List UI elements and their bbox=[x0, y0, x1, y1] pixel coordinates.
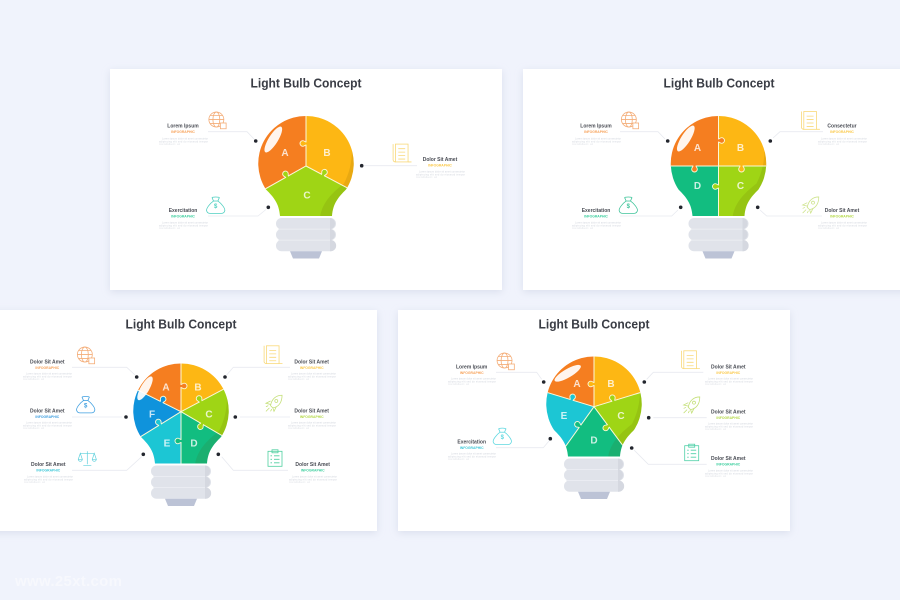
callout: bottom right bbox=[216, 450, 337, 484]
title: Light Bulb Concept bbox=[538, 318, 650, 332]
callout: top left: incididunt ut bbox=[23, 378, 44, 381]
callout: middle left: Lorem ipsum dolor sit amet consectetur bbox=[26, 422, 72, 424]
callout: bottom left: INFOGRAPHIC bbox=[36, 469, 61, 473]
bulb: A B C D: B bbox=[737, 143, 744, 154]
callout: top right: incididunt ut bbox=[288, 378, 309, 381]
bulb: A to E: E bbox=[561, 411, 568, 422]
callout: Dolor Sit Amet: Lorem ipsum dolor sit amet consectetur bbox=[419, 170, 465, 174]
callout: middle right: adipiscing elit sed do eiusmod tempor bbox=[705, 425, 753, 428]
callout: Lorem Ipsum: incididunt ut bbox=[448, 383, 469, 386]
callout: top left: INFOGRAPHIC bbox=[35, 366, 60, 370]
callout: middle right: incididunt ut bbox=[705, 428, 726, 431]
callout: bottom right: adipiscing elit sed do eiusmod tempor bbox=[705, 472, 753, 475]
callout: Exercitation: Lorem ipsum dolor sit amet consectetur bbox=[162, 222, 208, 224]
bulb: A to F: B bbox=[194, 382, 202, 393]
callout: Exercitation: INFOGRAPHIC bbox=[460, 446, 484, 450]
bulb: A to E bbox=[546, 356, 642, 499]
callout: bottom right: incididunt ut bbox=[705, 475, 726, 478]
callout: top right: INFOGRAPHIC bbox=[716, 371, 741, 375]
callout: Dolor Sit Amet: Lorem ipsum dolor sit amet consectetur bbox=[821, 222, 867, 224]
bulb: A B C: B bbox=[323, 148, 331, 159]
callout: top right: adipiscing elit sed do eiusmod tempor bbox=[705, 380, 753, 383]
callout: bottom left: adipiscing elit sed do eiusmod tempor bbox=[24, 478, 73, 481]
callout: Lorem Ipsum: incididunt ut bbox=[572, 143, 593, 146]
bulb: A to E: B bbox=[607, 379, 615, 390]
callout: Lorem Ipsum: Lorem Ipsum bbox=[456, 364, 488, 370]
callout: Exercitation: Exercitation bbox=[457, 440, 486, 446]
callout: Dolor Sit Amet: incididunt ut bbox=[818, 227, 839, 230]
callout: Lorem Ipsum: Lorem Ipsum bbox=[167, 124, 199, 130]
callout: Exercitation: Lorem ipsum dolor sit amet consectetur bbox=[575, 222, 621, 224]
callout: Dolor Sit Amet: adipiscing elit sed do eiusmod tempor bbox=[818, 224, 867, 227]
bulb: A B C D: C bbox=[737, 181, 744, 192]
callout: Exercitation: Lorem ipsum dolor sit amet consectetur bbox=[451, 452, 496, 456]
bulb: A B C D: D bbox=[694, 181, 701, 192]
callout: Dolor Sit Amet: Dolor Sit Amet bbox=[423, 157, 458, 163]
callout: Dolor Sit Amet: adipiscing elit sed do eiusmod tempor bbox=[416, 173, 465, 176]
callout: middle left: Dolor Sit Amet bbox=[30, 408, 65, 414]
callout: Exercitation: $ bbox=[214, 204, 218, 210]
callout: middle left: INFOGRAPHIC bbox=[35, 415, 60, 419]
callout: Exercitation: Exercitation bbox=[169, 208, 197, 214]
callout: bottom left: Dolor Sit Amet bbox=[31, 462, 66, 468]
callout: middle left: adipiscing elit sed do eiusmod tempor bbox=[23, 424, 72, 427]
callout: Lorem Ipsum: INFOGRAPHIC bbox=[171, 130, 195, 134]
panel: six-part bulb bbox=[0, 310, 377, 531]
callout: Dolor Sit Amet: Dolor Sit Amet bbox=[825, 208, 860, 214]
callout: top left: Dolor Sit Amet bbox=[30, 360, 65, 366]
callout: bottom right: INFOGRAPHIC bbox=[716, 463, 741, 467]
callout: middle right: adipiscing elit sed do eiusmod tempor bbox=[288, 424, 336, 427]
title: Light Bulb Concept bbox=[664, 76, 775, 90]
callout: Lorem Ipsum bbox=[159, 112, 258, 146]
callout: Lorem Ipsum: incididunt ut bbox=[159, 143, 180, 146]
callout: Exercitation: $ bbox=[627, 204, 631, 210]
callout: middle right: Lorem ipsum dolor sit amet consectetur bbox=[708, 422, 753, 426]
callout: Lorem Ipsum: Lorem Ipsum bbox=[580, 124, 612, 130]
panel: three-part bulb bbox=[110, 69, 502, 290]
callout: middle right: INFOGRAPHIC bbox=[300, 415, 324, 419]
callout: Exercitation: incididunt ut bbox=[448, 458, 469, 461]
callout: Exercitation: Exercitation bbox=[582, 208, 610, 214]
bulb: A to F: C bbox=[205, 410, 213, 420]
callout: Consectetur: adipiscing elit sed do eiusmod tempor bbox=[818, 140, 867, 143]
callout: Consectetur: Lorem ipsum dolor sit amet consectetur bbox=[821, 138, 867, 140]
callout: Lorem Ipsum: Lorem ipsum dolor sit amet consectetur bbox=[162, 138, 208, 140]
callout: Lorem Ipsum bbox=[448, 353, 546, 386]
callout: bottom left: incididunt ut bbox=[24, 481, 45, 484]
bulb: A B C D: A bbox=[694, 143, 701, 154]
callout: Exercitation: adipiscing elit sed do eiusmod tempor bbox=[572, 224, 621, 227]
callout: middle left bbox=[23, 396, 128, 430]
watermark: www.25xt.com bbox=[14, 573, 122, 590]
callout: Exercitation bbox=[448, 428, 552, 461]
callout: Exercitation: incididunt ut bbox=[572, 227, 593, 230]
callout: middle right: incididunt ut bbox=[288, 427, 309, 430]
callout: top right: incididunt ut bbox=[705, 383, 726, 386]
callout: Lorem Ipsum: adipiscing elit sed do eiusmod tempor bbox=[448, 380, 496, 383]
callout: Exercitation: incididunt ut bbox=[159, 227, 180, 230]
callout: top left bbox=[23, 347, 138, 381]
callout: Consectetur: incididunt ut bbox=[818, 143, 839, 146]
callout: bottom left bbox=[24, 451, 145, 484]
bulb: A B C: A bbox=[281, 148, 289, 159]
callout: middle right bbox=[647, 397, 753, 431]
callout: middle right: Lorem ipsum dolor sit amet consectetur bbox=[291, 422, 336, 424]
bulb: A to F: E bbox=[164, 438, 171, 450]
callout: bottom left: Lorem ipsum dolor sit amet consectetur bbox=[27, 476, 73, 478]
callout: top right: Dolor Sit Amet bbox=[711, 364, 746, 370]
callout: Exercitation bbox=[159, 197, 270, 230]
callout: Exercitation: INFOGRAPHIC bbox=[584, 214, 608, 218]
callout: middle right: INFOGRAPHIC bbox=[716, 416, 741, 420]
bulb: A to F: D bbox=[190, 438, 198, 450]
callout: top right: Dolor Sit Amet bbox=[294, 360, 329, 366]
callout: top right: Lorem ipsum dolor sit amet consectetur bbox=[291, 372, 336, 376]
bulb: A B C D bbox=[670, 116, 766, 258]
callout: bottom right: Lorem ipsum dolor sit amet consectetur bbox=[292, 476, 337, 478]
callout: bottom right: adipiscing elit sed do eiusmod tempor bbox=[289, 478, 337, 481]
callout: Lorem Ipsum: adipiscing elit sed do eiusmod tempor bbox=[159, 140, 208, 143]
callout: middle left: $ bbox=[84, 404, 88, 410]
panel: four-part bulb bbox=[523, 69, 900, 290]
callout: Exercitation bbox=[572, 197, 682, 230]
callout: top right: INFOGRAPHIC bbox=[300, 366, 324, 370]
bulb: A to F: F bbox=[149, 410, 155, 420]
callout: top right: adipiscing elit sed do eiusmod tempor bbox=[288, 375, 336, 378]
callout: bottom right: Dolor Sit Amet bbox=[711, 456, 746, 462]
callout: Lorem Ipsum: INFOGRAPHIC bbox=[584, 130, 608, 134]
callout: top right bbox=[642, 351, 753, 386]
bulb: A B C: C bbox=[303, 190, 311, 202]
callout: Dolor Sit Amet: INFOGRAPHIC bbox=[830, 214, 854, 218]
bulb: A to E: A bbox=[573, 379, 581, 390]
callout: top left: adipiscing elit sed do eiusmod tempor bbox=[23, 375, 72, 378]
callout: bottom right: Dolor Sit Amet bbox=[295, 462, 330, 468]
callout: Lorem Ipsum: adipiscing elit sed do eiusmod tempor bbox=[572, 140, 621, 143]
bulb: A to E: C bbox=[617, 411, 625, 422]
callout: bottom right bbox=[630, 444, 753, 478]
callout: Exercitation: adipiscing elit sed do eiusmod tempor bbox=[159, 224, 208, 227]
callout: Lorem Ipsum: INFOGRAPHIC bbox=[460, 371, 484, 375]
callout: top right bbox=[223, 346, 336, 381]
panel: five-part bulb bbox=[398, 310, 790, 531]
bulb: A to F bbox=[133, 364, 229, 506]
callout: Exercitation: INFOGRAPHIC bbox=[171, 214, 195, 218]
bulb: A to E: D bbox=[590, 436, 598, 446]
callout: Exercitation: $ bbox=[501, 435, 505, 441]
title: Light Bulb Concept bbox=[250, 76, 362, 90]
callout: Consectetur bbox=[768, 112, 867, 146]
bulb: A B C bbox=[258, 116, 354, 258]
callout: middle left: incididunt ut bbox=[23, 427, 44, 430]
title: Light Bulb Concept bbox=[126, 318, 237, 332]
callout: Dolor Sit Amet: INFOGRAPHIC bbox=[428, 164, 452, 168]
callout: middle right: Dolor Sit Amet bbox=[294, 408, 329, 414]
callout: Exercitation: adipiscing elit sed do eiusmod tempor bbox=[448, 455, 496, 458]
callout: Dolor Sit Amet bbox=[756, 197, 867, 230]
callout: middle right bbox=[234, 395, 336, 430]
callout: Lorem Ipsum: Lorem ipsum dolor sit amet consectetur bbox=[451, 378, 496, 380]
callout: bottom right: INFOGRAPHIC bbox=[301, 469, 325, 473]
callout: middle right: Dolor Sit Amet bbox=[711, 410, 746, 416]
callout: Consectetur: Consectetur bbox=[827, 124, 857, 130]
callout: top left: Lorem ipsum dolor sit amet consectetur bbox=[26, 372, 72, 376]
callout: Dolor Sit Amet bbox=[360, 144, 465, 179]
bulb: A to F: A bbox=[162, 382, 170, 393]
callout: Consectetur: INFOGRAPHIC bbox=[830, 130, 854, 134]
callout: bottom right: incididunt ut bbox=[289, 481, 310, 484]
callout: Dolor Sit Amet: incididunt ut bbox=[416, 176, 437, 179]
callout: top right: Lorem ipsum dolor sit amet consectetur bbox=[708, 378, 753, 380]
callout: Lorem Ipsum bbox=[572, 112, 670, 146]
callout: bottom right: Lorem ipsum dolor sit amet consectetur bbox=[708, 470, 753, 472]
callout: Lorem Ipsum: Lorem ipsum dolor sit amet consectetur bbox=[575, 138, 621, 140]
